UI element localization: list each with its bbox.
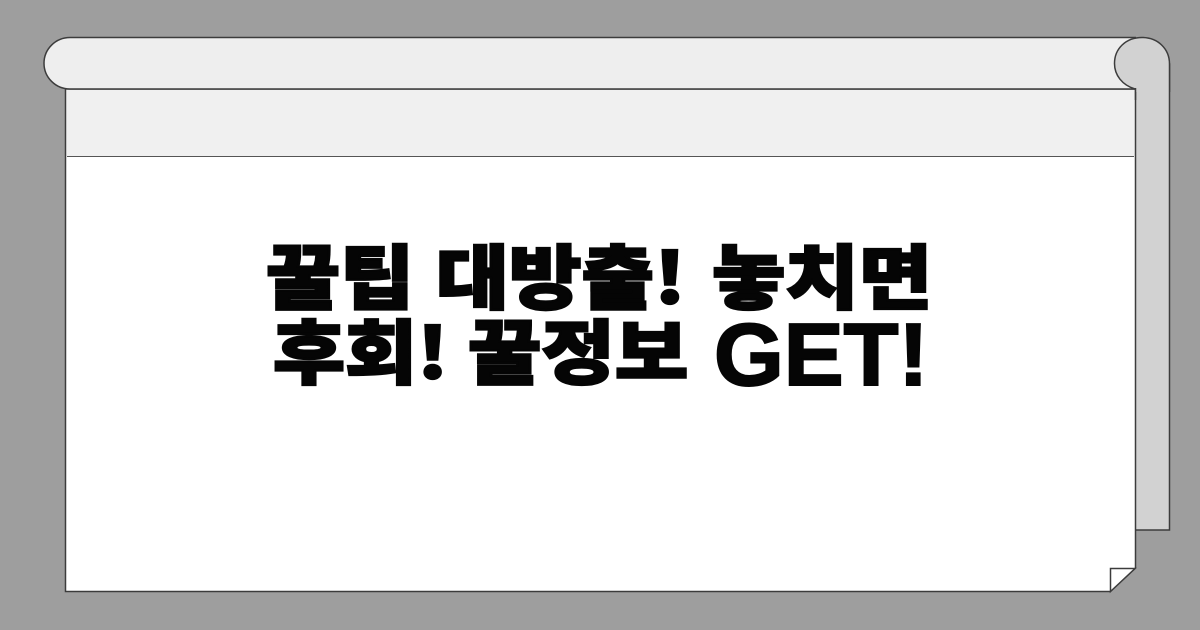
panel: scroll top roll: [44, 38, 1170, 100]
title: 꿀정보: [468, 297, 688, 399]
title: 대방출!: [436, 222, 686, 324]
panel: paper sheet: [66, 89, 1136, 592]
panel: header band: [66, 90, 1134, 156]
icon: folded page corner: [1110, 568, 1135, 592]
title: 후회!: [273, 298, 448, 399]
title: [266, 222, 932, 404]
title: 놓치면: [712, 222, 932, 324]
title: 꿀팁: [266, 222, 414, 323]
title: GET!: [714, 306, 928, 404]
panel: scroll back strip: [1135, 64, 1170, 530]
